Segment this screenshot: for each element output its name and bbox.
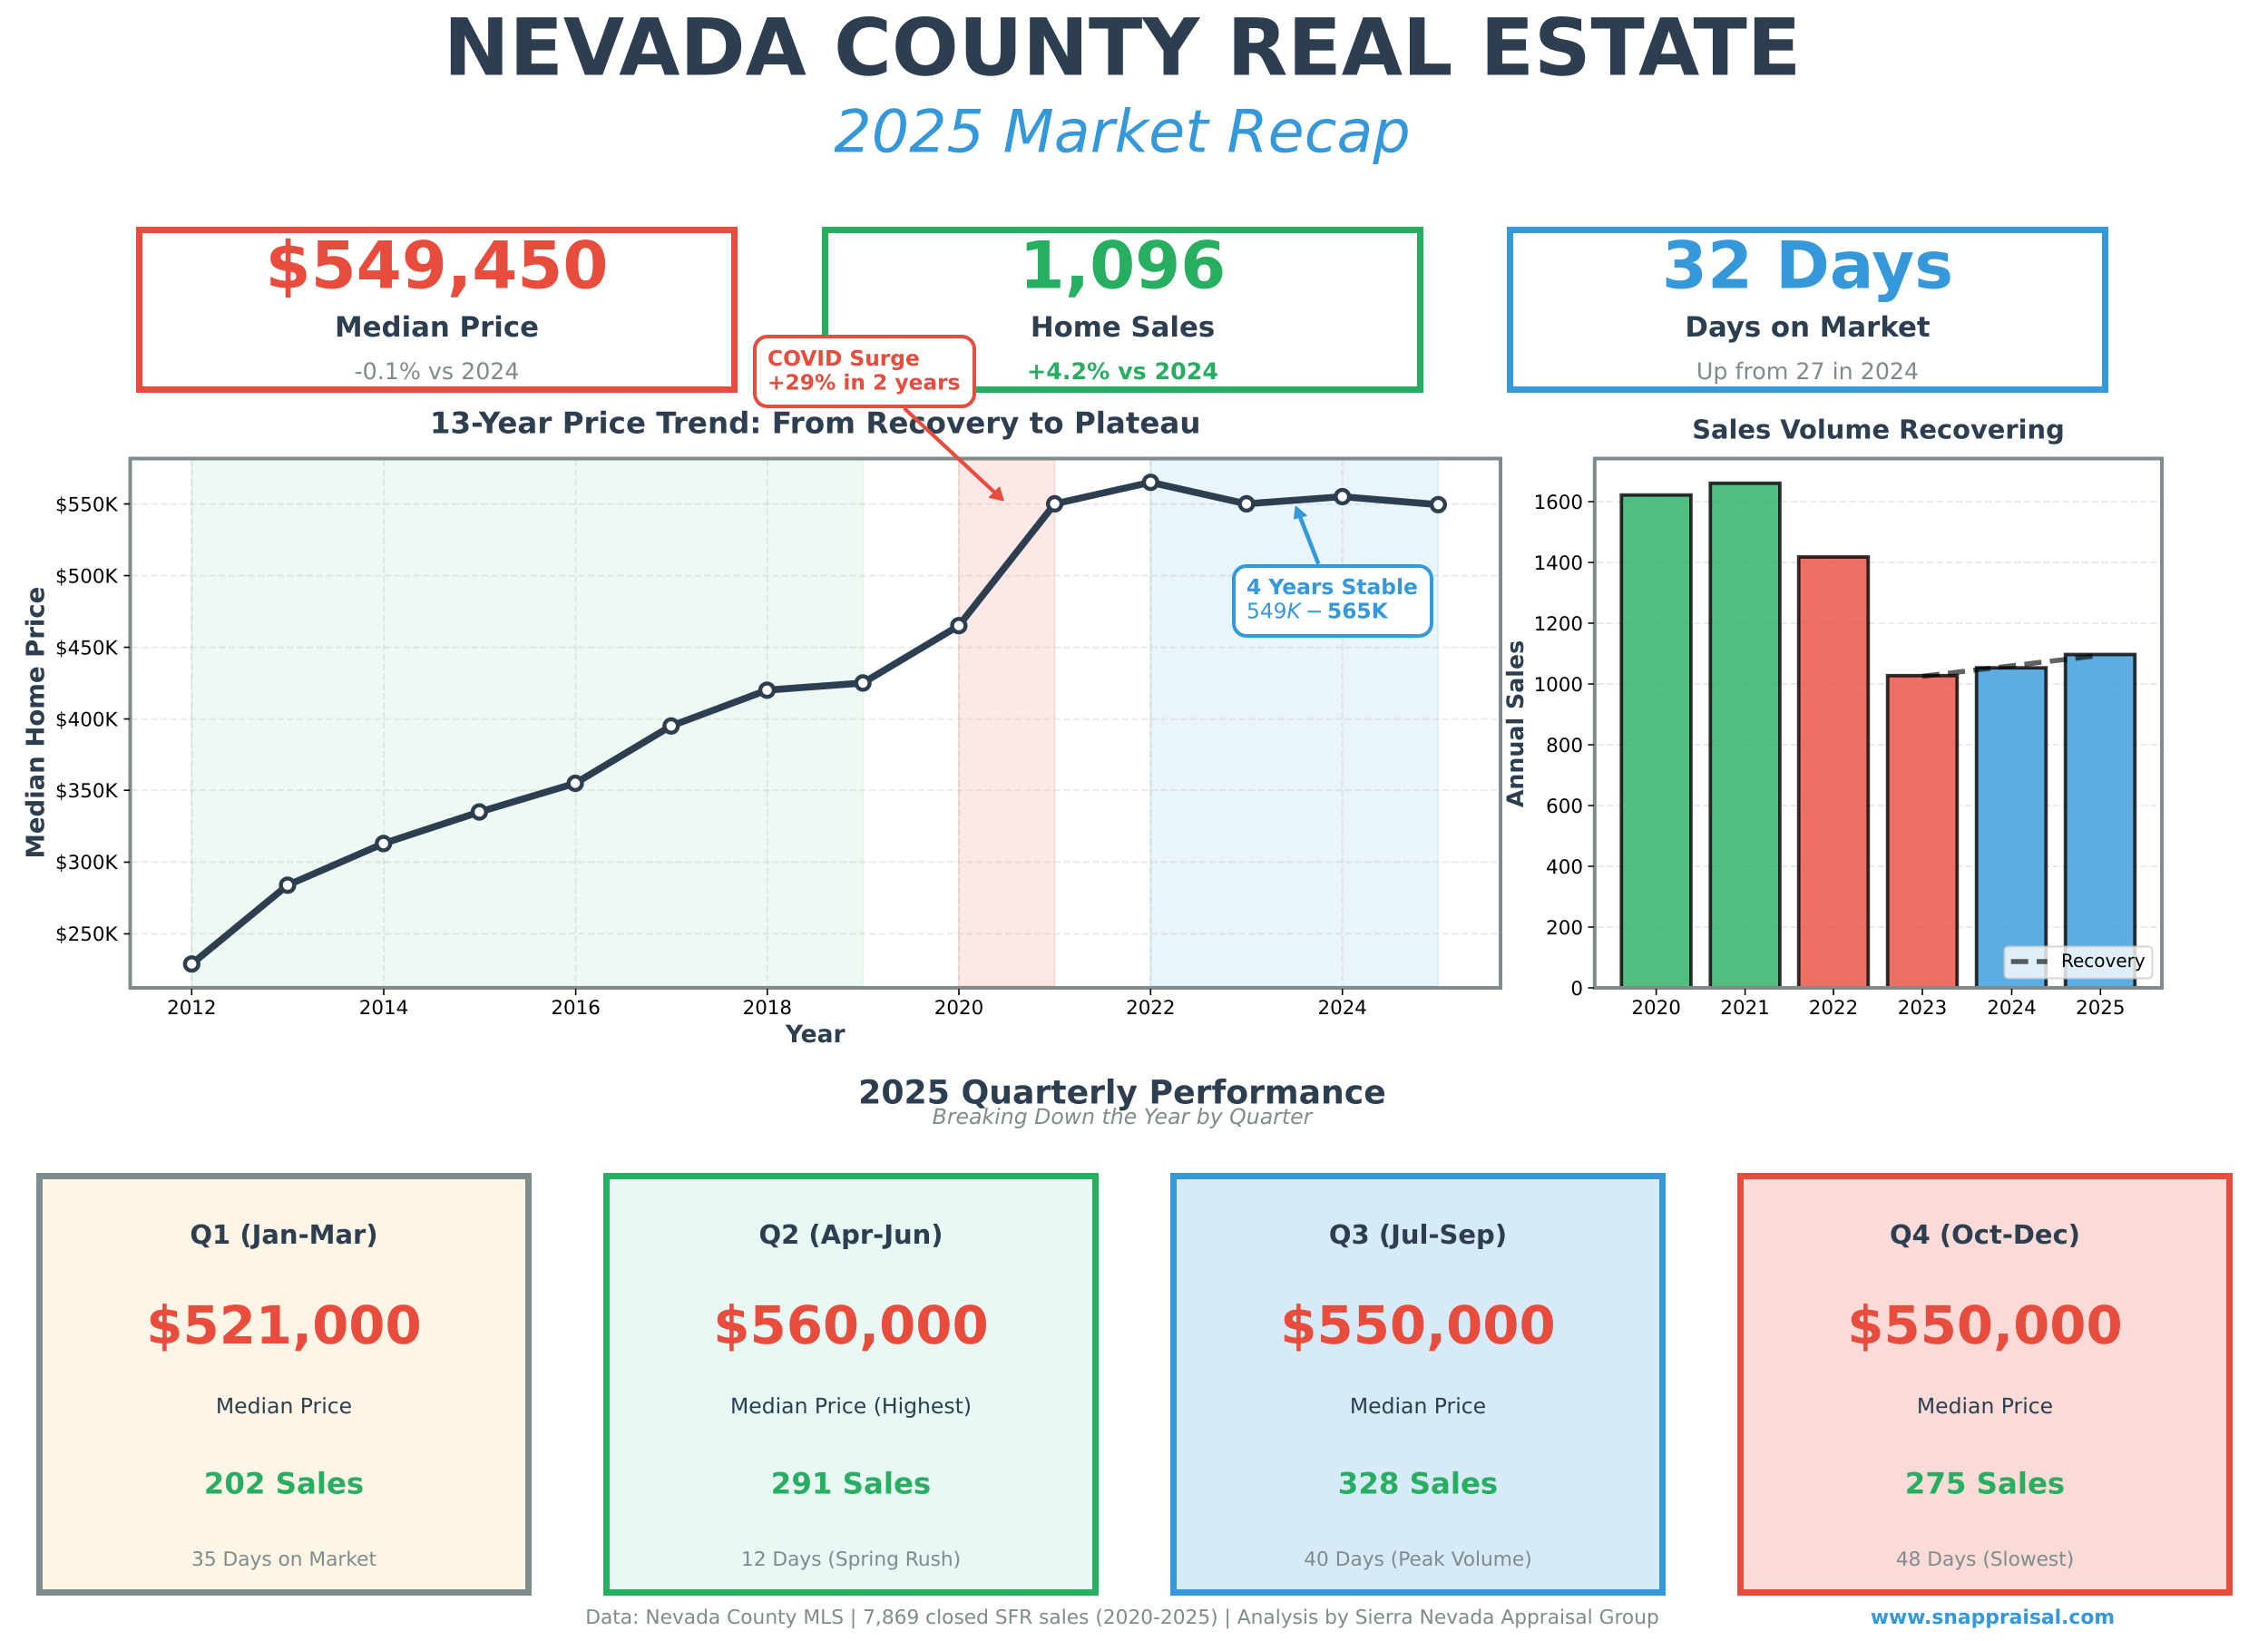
panel: Q2 <box>606 1176 1096 1593</box>
y axis tick labels: 200 <box>1546 917 1583 940</box>
panel: days on market KPI <box>1510 228 2105 390</box>
shaded period bands <box>191 460 1438 986</box>
x axis tick labels: 2022 <box>1809 997 1858 1020</box>
section heading: quarterly performance: 2025 Quarterly Performance <box>858 1073 1386 1112</box>
price line <box>191 483 1438 964</box>
y axis tick labels: $300K <box>55 852 118 874</box>
x axis tick labels: 2014 <box>359 997 408 1020</box>
section subheading: Breaking Down the Year by Quarter <box>933 1104 1314 1129</box>
x axis tick labels: 2022 <box>1126 997 1176 1020</box>
x axis tick labels: 2020 <box>934 997 983 1020</box>
recovery trend line <box>1922 656 2096 677</box>
panel: Q2: 12 Days (Spring Rush) <box>741 1548 961 1571</box>
y axis tick labels: 400 <box>1546 856 1583 879</box>
panel: Q4: 275 Sales <box>1905 1467 2065 1501</box>
callout: 4 years stable <box>1234 566 1432 636</box>
y axis tick labels: $500K <box>55 565 118 588</box>
x axis tick labels: 2024 <box>1317 997 1367 1020</box>
x axis tick labels: 2018 <box>743 997 792 1020</box>
panel: Q2: Median Price (Highest) <box>730 1393 972 1419</box>
bar chart: sales volume <box>1502 414 2162 1020</box>
panel: home sales KPI: 1,096 <box>1020 228 1226 304</box>
callout: COVID surge <box>755 337 974 406</box>
line chart: 13-year price trend <box>22 337 1501 1049</box>
callout: 4 years stable: − <box>1305 600 1324 624</box>
panel: median price KPI: Median Price <box>335 311 539 344</box>
title: NEVADA COUNTY REAL ESTATE <box>444 2 1801 93</box>
y axis tick labels: $450K <box>55 637 118 659</box>
y axis tick labels: $400K <box>55 708 118 731</box>
y axis tick labels: 1200 <box>1534 613 1583 636</box>
arrow: COVID surge <box>904 408 1003 501</box>
panel: median price KPI <box>140 228 735 390</box>
panel: Q3: 40 Days (Peak Volume) <box>1304 1548 1532 1571</box>
data point markers <box>185 475 1445 971</box>
subtitle: 2025 Market Recap <box>834 99 1411 167</box>
panel: Q1: Q1 (Jan-Mar) <box>190 1219 378 1250</box>
y axis tick labels <box>1534 492 1583 1001</box>
panel: median price KPI: $549,450 <box>265 228 609 304</box>
y axis tick labels: 1400 <box>1534 552 1583 575</box>
callout: 4 years stable: K <box>1286 600 1303 624</box>
x axis tick labels: 2021 <box>1720 997 1770 1020</box>
x axis tick labels: 2012 <box>167 997 217 1020</box>
y axis tick labels <box>55 493 118 946</box>
footer: website: www.snappraisal.com <box>1871 1607 2115 1629</box>
panel: Q1: $521,000 <box>146 1294 422 1356</box>
y axis tick labels: 1600 <box>1534 492 1583 514</box>
chart heading: 13-Year Price Trend: From Recovery to Plateau <box>430 406 1200 441</box>
panel: Q3: 328 Sales <box>1338 1467 1498 1501</box>
y axis tick labels: $550K <box>55 493 118 516</box>
y axis tick labels: $250K <box>55 923 118 946</box>
x axis tick labels <box>1631 997 2126 1020</box>
panel: home sales KPI <box>826 228 1421 390</box>
x axis tick labels <box>167 997 1367 1020</box>
callout: 4 years stable: 565K <box>1327 600 1389 624</box>
panel: home sales KPI: +4.2% vs 2024 <box>1027 358 1218 385</box>
panel: Q4 <box>1740 1176 2230 1593</box>
callout: COVID surge: +29% in 2 years <box>767 370 960 395</box>
chart heading: Sales Volume Recovering <box>1692 414 2065 444</box>
y axis label: Median Home Price <box>22 587 51 858</box>
panel: Q4: Median Price <box>1917 1393 2053 1419</box>
panel: Q1: 202 Sales <box>204 1467 364 1501</box>
y axis tick labels: 600 <box>1546 796 1583 818</box>
panel: Q4: Q4 (Oct-Dec) <box>1890 1219 2080 1250</box>
callout: COVID surge: COVID Surge <box>767 347 920 371</box>
panel: days on market KPI: 32 Days <box>1662 228 1953 304</box>
panel: Q3 <box>1174 1176 1662 1593</box>
x axis tick labels: 2024 <box>1987 997 2037 1020</box>
legend: Recovery <box>2061 950 2146 972</box>
panel: Q2: Q2 (Apr-Jun) <box>758 1219 943 1250</box>
panel: Q1: 35 Days on Market <box>191 1548 376 1571</box>
x axis tick labels: 2020 <box>1631 997 1681 1020</box>
x axis tick labels: 2025 <box>2076 997 2126 1020</box>
y axis tick labels: $350K <box>55 780 118 803</box>
panel: days on market KPI: Up from 27 in 2024 <box>1696 358 1919 385</box>
y axis tick labels: 1000 <box>1534 674 1583 697</box>
panel: Q4: 48 Days (Slowest) <box>1896 1548 2074 1571</box>
y axis tick labels: 800 <box>1546 735 1583 757</box>
y axis tick labels: 0 <box>1570 978 1583 1001</box>
callout: 4 years stable: 549 <box>1246 600 1286 624</box>
panel: Q2: 291 Sales <box>771 1467 931 1501</box>
panel: Q4: $550,000 <box>1847 1294 2123 1356</box>
panel: Q1: Median Price <box>216 1393 352 1419</box>
callout: 4 years stable: 4 Years Stable <box>1246 574 1418 600</box>
x axis label: Year <box>785 1021 846 1049</box>
panel: home sales KPI: Home Sales <box>1031 311 1215 344</box>
x axis tick labels: 2016 <box>551 997 601 1020</box>
x axis tick labels: 2023 <box>1898 997 1947 1020</box>
arrow: stable plateau <box>1295 506 1318 564</box>
y axis label: Annual Sales <box>1502 640 1529 807</box>
panel: Q2: $560,000 <box>713 1294 989 1356</box>
panel: Q3: $550,000 <box>1280 1294 1556 1356</box>
legend <box>2005 947 2152 978</box>
bars by year <box>1621 484 2135 988</box>
panel: days on market KPI: Days on Market <box>1685 311 1931 344</box>
panel: Q1 <box>40 1176 528 1593</box>
panel: Q3: Q3 (Jul-Sep) <box>1329 1219 1507 1250</box>
panel: median price KPI: -0.1% vs 2024 <box>354 358 520 385</box>
panel: Q3: Median Price <box>1350 1393 1486 1419</box>
footer: data source: Data: Nevada County MLS | 7,869 closed SFR sales (2020-2025) | Analysis by Sierra Nevada Appraisal Group <box>585 1607 1659 1629</box>
